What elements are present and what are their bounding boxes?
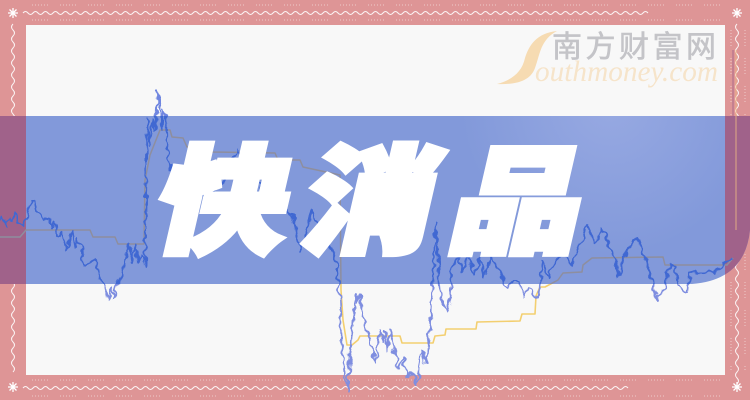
logo text: Chinese name: 南方财富网 — [552, 31, 716, 64]
title: 快消品: 品 — [440, 138, 600, 268]
band: blue title ribbon — [0, 116, 750, 284]
logo text: domain: outhmoney.com — [535, 55, 718, 88]
title: 快消品 — [145, 138, 600, 268]
title: 快消品: 消 — [292, 138, 452, 268]
icon: logo swoosh S — [497, 31, 557, 84]
logo: Southmoney watermark — [497, 31, 718, 88]
title: 快消品: 快 — [145, 138, 305, 268]
